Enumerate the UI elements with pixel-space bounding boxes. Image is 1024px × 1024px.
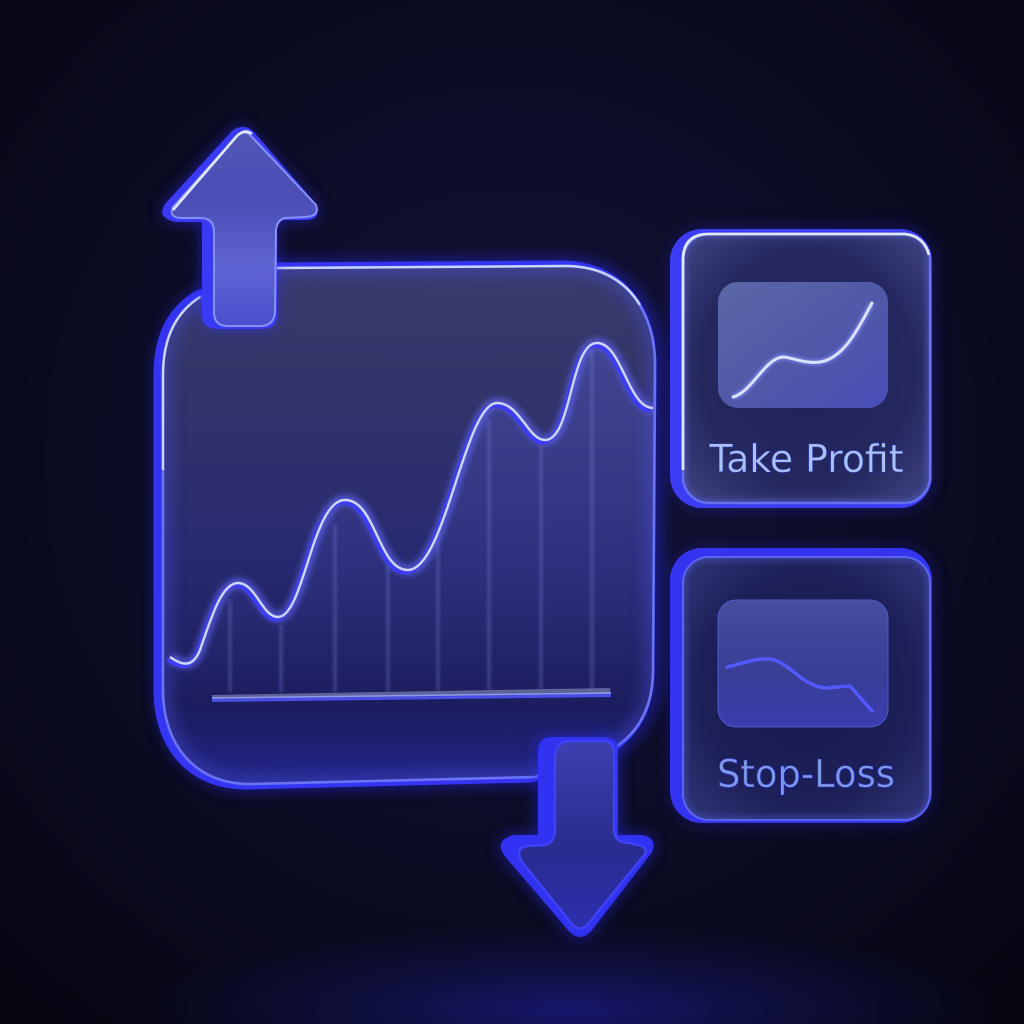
chart area fill [170, 343, 653, 695]
up arrow glow [163, 127, 318, 328]
up arrow extruded edge [162, 127, 318, 329]
take profit border [683, 234, 930, 503]
floor glow [0, 900, 1024, 1024]
panel inner glow [163, 266, 655, 784]
icon: down arrow [501, 737, 654, 937]
take profit mini chart glow [733, 303, 872, 397]
up arrow body [172, 132, 317, 326]
chart line [170, 343, 653, 664]
chart line shadow [168, 346, 650, 666]
take profit extruded edge [670, 229, 932, 508]
panel extruded edge [159, 266, 651, 784]
down arrow glow [501, 737, 654, 937]
take profit card [683, 234, 930, 503]
stop-loss border [683, 557, 930, 820]
take profit mini chart panel [718, 282, 888, 408]
chart line glow [170, 343, 653, 664]
take profit top highlight [683, 234, 929, 470]
take profit label: Take Profit [709, 437, 904, 481]
stop-loss mini chart [718, 600, 888, 727]
stop-loss mini chart line [727, 659, 872, 711]
panel: take profit [670, 229, 932, 508]
chart vertical guides [230, 350, 592, 692]
take profit mini chart [718, 282, 888, 408]
stop-loss mini chart panel [718, 600, 888, 727]
panel: stop-loss [670, 548, 932, 823]
take profit mini chart line [733, 303, 872, 397]
up arrow bright edge [173, 132, 252, 210]
panel top highlight [163, 266, 640, 470]
stop-loss label: Stop-Loss [717, 752, 895, 796]
take profit glow [676, 232, 930, 505]
icon: up arrow [162, 127, 318, 329]
take profit inner glow [683, 234, 930, 503]
stop-loss card [683, 557, 930, 820]
panel: main chart [159, 266, 655, 784]
chart baseline [212, 688, 611, 702]
stop-loss inner glow [683, 557, 930, 820]
panel glow [163, 266, 655, 784]
stop-loss extruded edge [670, 548, 932, 823]
down arrow extruded edge [501, 737, 654, 937]
stop-loss glow [676, 552, 930, 821]
panel body [163, 266, 655, 784]
down arrow body [519, 741, 646, 928]
panel border highlight [163, 266, 655, 784]
